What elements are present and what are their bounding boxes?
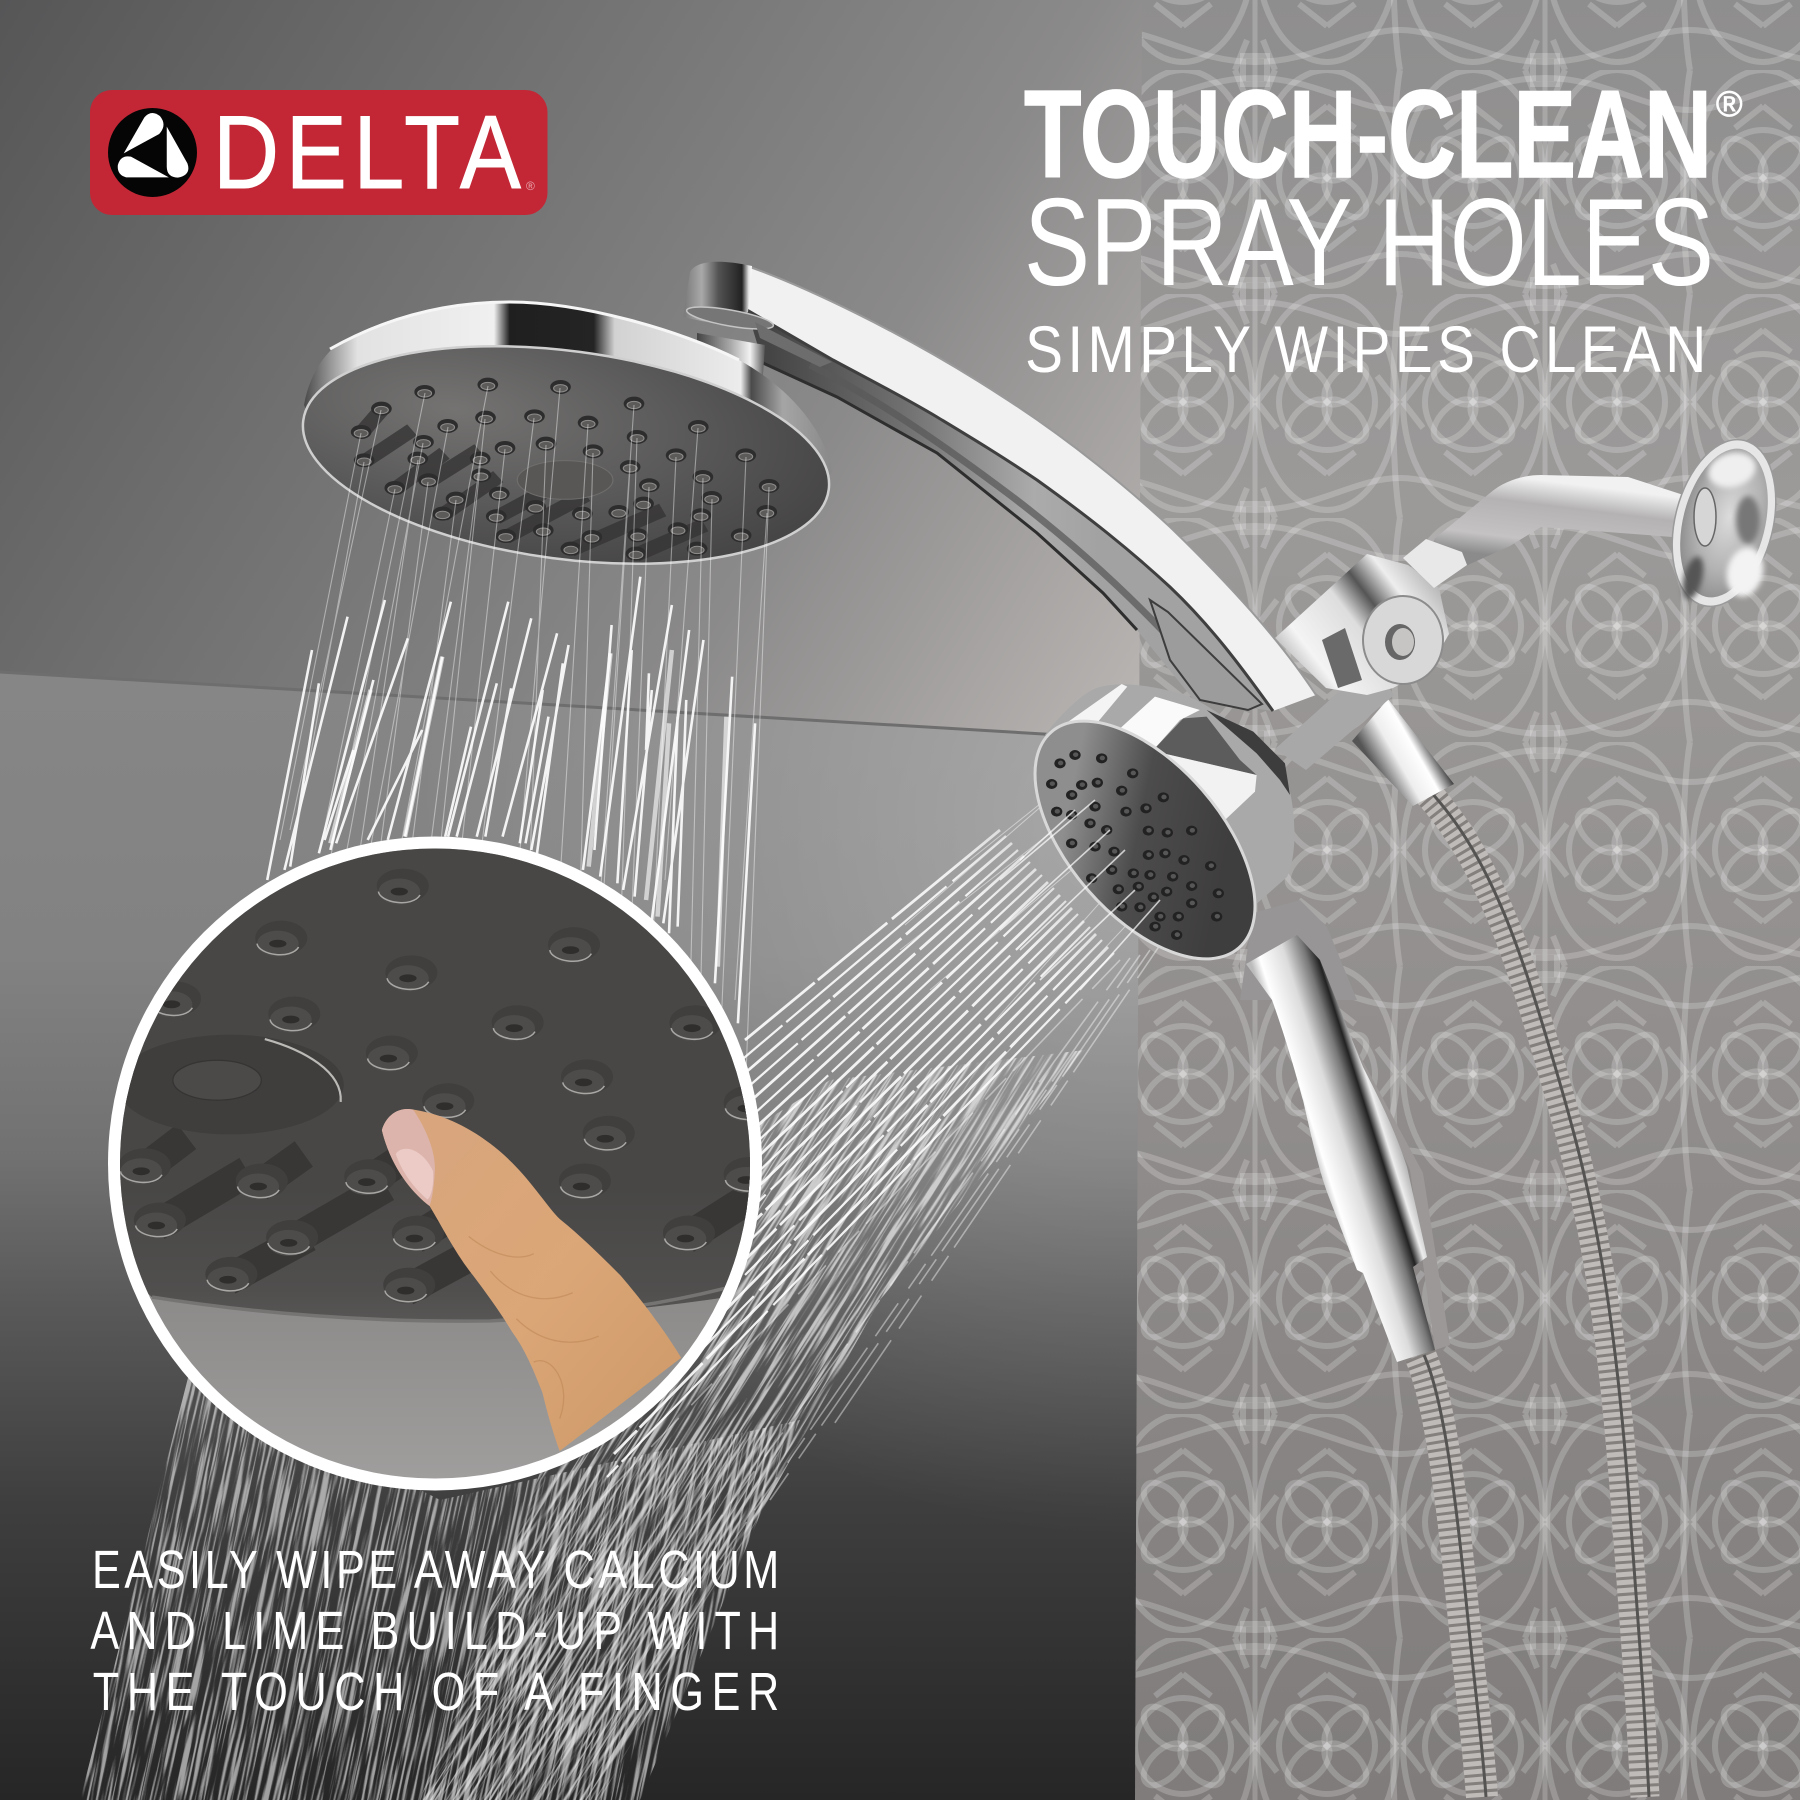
hose bracket cone xyxy=(1352,699,1454,806)
finger xyxy=(382,1109,681,1451)
shower arm pipe xyxy=(1434,475,1699,569)
arm connector xyxy=(683,262,832,375)
magnified spray plate xyxy=(120,848,750,1320)
hand shower body xyxy=(1045,684,1294,955)
callout: magnified finger wiping nozzles xyxy=(100,820,794,1500)
wall flange xyxy=(1656,429,1792,617)
background: shower alcove upper wall xyxy=(0,0,1145,800)
spray jets leaving the face xyxy=(1000,800,1160,990)
caption: calcium and lime: EASILY WIPE AWAY CALCIUM xyxy=(92,1541,779,1600)
hand shower handle xyxy=(1246,935,1450,1362)
caption: calcium and lime xyxy=(90,1541,779,1722)
logo registered mark: ® xyxy=(526,179,535,193)
arm dock clip xyxy=(1150,600,1262,710)
mount disc xyxy=(1363,596,1443,684)
water: rain streams, bright streaks xyxy=(267,577,755,1023)
hand shower face xyxy=(994,682,1296,998)
subheading: Simply wipes clean: SIMPLY WIPES CLEAN xyxy=(1025,313,1706,387)
fingernail xyxy=(382,1109,435,1206)
hose: upper section xyxy=(1425,790,1649,1797)
caption: calcium and lime: AND LIME BUILD-UP WITH xyxy=(90,1602,779,1661)
logo wordmark: DELTA xyxy=(213,94,522,210)
chrome rim xyxy=(304,302,832,530)
large rain shower head xyxy=(290,302,842,593)
hand shower head xyxy=(994,682,1296,998)
water: rain streams, fine lines xyxy=(280,386,769,1100)
water: hand shower spray xyxy=(80,790,1160,1800)
curved chrome arm xyxy=(747,267,1316,711)
logo: Delta badge xyxy=(90,90,548,215)
hose: lower section xyxy=(1420,1355,1486,1797)
background: lower wall ledge xyxy=(0,672,1145,1800)
hand shower nozzles xyxy=(1046,750,1224,940)
callout white ring xyxy=(108,836,762,1490)
logo emblem petals xyxy=(118,113,188,178)
hand shower neck reflection xyxy=(1240,900,1357,1000)
mount collar xyxy=(1403,539,1467,588)
diverter mount xyxy=(1275,539,1467,770)
panel: patterned tile wall xyxy=(1135,0,1800,1800)
center button xyxy=(517,461,613,499)
magnified plate button xyxy=(116,1035,344,1134)
caption: calcium and lime: THE TOUCH OF A FINGER xyxy=(93,1663,779,1722)
magnified nozzles xyxy=(119,869,776,1304)
spray nozzles xyxy=(351,378,779,561)
heading registered mark: ® xyxy=(1716,83,1743,124)
head underside xyxy=(290,317,842,593)
